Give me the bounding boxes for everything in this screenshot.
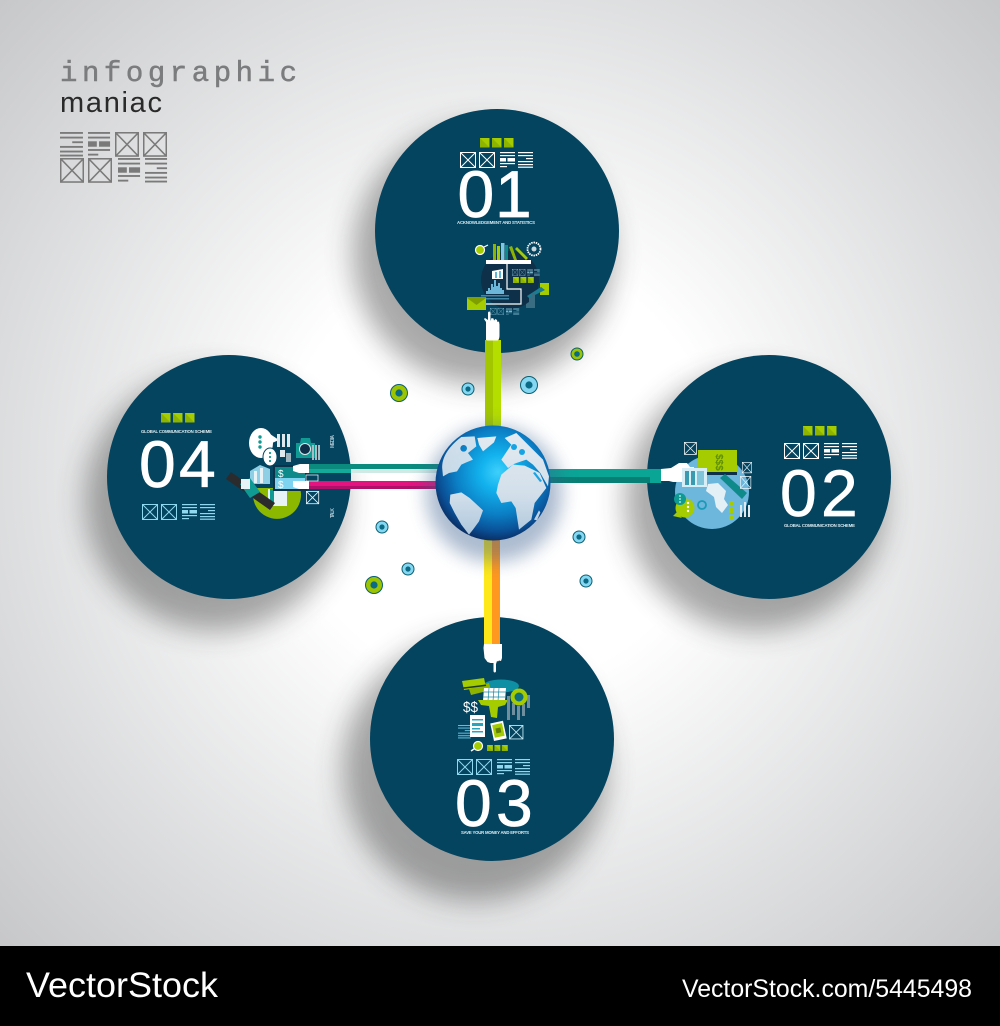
document <box>682 468 707 487</box>
dot blue <box>462 383 474 395</box>
group: circle 02 content <box>650 426 858 530</box>
arm: right teal <box>548 469 660 483</box>
hand pointing up <box>484 312 500 340</box>
document <box>470 715 485 737</box>
hand <box>661 463 694 482</box>
caption: GLOBAL COMMUNICATION SCHEME <box>141 429 212 434</box>
logo word: infographic: infographic <box>60 57 297 90</box>
caption: GLOBAL COMMUNICATION SCHEME <box>784 523 855 528</box>
sleeve <box>650 469 661 483</box>
green squares <box>803 426 836 436</box>
dot green <box>571 348 583 360</box>
panel: circle 04 <box>107 355 351 599</box>
green screen: $$$ <box>713 454 724 471</box>
dot blue <box>580 575 592 587</box>
shelf <box>486 260 531 264</box>
globe continents <box>442 433 549 535</box>
group: circle 01 content <box>457 138 549 340</box>
ring <box>698 501 706 509</box>
dot green <box>366 576 382 594</box>
green cards <box>462 678 491 695</box>
panel: circle 03 <box>370 617 614 861</box>
screen: $ <box>278 469 284 480</box>
hand bottom <box>293 481 309 489</box>
label media: MEDIA <box>330 435 336 448</box>
footer brand: VectorStock <box>26 966 219 1005</box>
pencil <box>720 474 747 499</box>
document outline <box>480 264 521 304</box>
gear <box>528 242 540 256</box>
solar panel grid <box>483 688 506 701</box>
green squares <box>161 413 194 422</box>
caption: ACKNOWLEDGEMENT AND STATISTICS <box>457 220 535 225</box>
small doc <box>492 269 503 279</box>
globe glow <box>426 426 562 562</box>
globe <box>426 426 562 562</box>
dot blue <box>520 376 538 394</box>
white document <box>268 489 287 506</box>
globe disc <box>675 455 749 529</box>
footer background <box>0 946 1000 1026</box>
teal envelope <box>240 478 260 498</box>
dot green <box>390 384 408 402</box>
map blob <box>706 483 728 513</box>
screen: $ <box>278 480 284 491</box>
dark disc <box>481 251 539 309</box>
bars <box>740 502 750 517</box>
logo: infographic maniac <box>60 57 297 182</box>
dollars: $$ <box>463 699 479 716</box>
teal bubble <box>674 493 686 505</box>
placeholder boxes <box>306 475 319 504</box>
hand top <box>293 464 309 473</box>
green disc <box>253 488 301 519</box>
mug <box>476 245 488 254</box>
circle shadows <box>85 125 885 901</box>
bottom placeholder row <box>490 308 519 315</box>
mini green squares <box>513 277 534 283</box>
green bubble <box>673 498 694 518</box>
hand pointing down <box>484 644 502 672</box>
magnifier <box>471 742 482 751</box>
building <box>250 465 270 484</box>
footer url: VectorStock.com/5445498 <box>682 975 972 1003</box>
bar chart <box>486 280 504 294</box>
placeholder row <box>784 443 857 459</box>
gray bars <box>526 293 535 308</box>
panel: circle 01 <box>375 109 619 353</box>
screen <box>273 465 307 491</box>
number 01: 01 <box>458 157 532 231</box>
arm: bottom yellow orange <box>484 538 500 644</box>
ring <box>512 690 526 704</box>
teal ellipse <box>483 680 519 692</box>
green squares <box>480 138 514 148</box>
chart lines <box>481 295 509 300</box>
logo word: maniac: maniac <box>60 87 162 119</box>
number 02: 02 <box>780 456 858 530</box>
white speech bubble <box>249 428 279 458</box>
globe inlets <box>511 444 542 482</box>
placeholder box <box>509 725 523 739</box>
arm: left magenta <box>309 481 439 489</box>
dot blue <box>402 563 414 575</box>
icon cluster: statistics <box>467 242 549 340</box>
placeholder boxes <box>684 442 752 488</box>
dot blue <box>376 521 388 533</box>
plane tile <box>527 283 549 301</box>
placeholder row <box>142 504 215 520</box>
number 04: 04 <box>139 427 216 501</box>
phone <box>490 721 507 741</box>
icon cluster: communication <box>650 442 752 529</box>
globe sphere <box>436 426 550 540</box>
group: circle 03 content <box>455 644 533 840</box>
caption: SAVE YOUR MONEY AND EFFORTS <box>461 830 529 835</box>
envelope <box>467 297 486 310</box>
small speech bubble <box>263 448 277 466</box>
green vertical squares <box>729 501 734 520</box>
placeholder row <box>460 152 533 168</box>
dark bar <box>226 472 275 510</box>
footer bar <box>0 946 1000 1026</box>
text lines <box>458 725 471 738</box>
group: circle 04 content <box>139 413 336 520</box>
arm: top green <box>485 340 501 428</box>
number 03: 03 <box>455 766 533 840</box>
panel: circle 02 <box>647 355 891 599</box>
decorative dots <box>366 348 592 594</box>
icon cluster: media talk <box>226 428 336 519</box>
camera <box>296 438 315 458</box>
books <box>493 243 528 260</box>
logo placeholder icons <box>60 132 167 182</box>
green funnel <box>478 700 508 718</box>
label talk: TALK <box>330 508 336 518</box>
placeholder row <box>458 759 530 775</box>
stripes <box>277 434 291 462</box>
green squares <box>487 745 508 751</box>
gray bars <box>507 695 530 720</box>
mini placeholder row <box>512 269 540 276</box>
arm: left teal <box>309 464 439 473</box>
dot blue <box>573 531 585 543</box>
camera stripes <box>312 445 320 460</box>
